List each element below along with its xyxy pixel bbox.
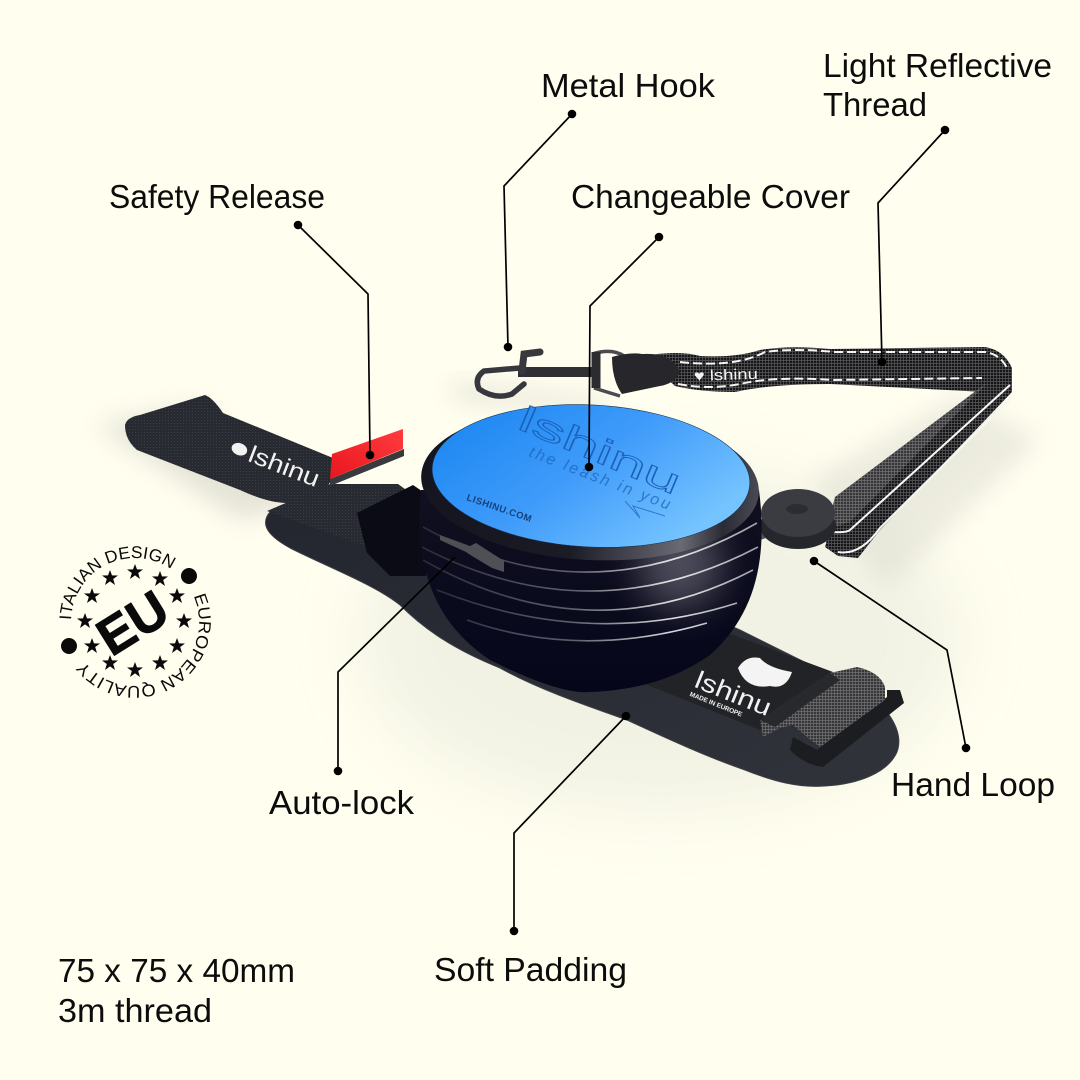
label: auto-lock: Auto-lock <box>269 784 415 821</box>
strap logo <box>227 434 323 493</box>
thread puck <box>756 489 836 549</box>
leash thread strap <box>642 347 1012 558</box>
label: changeable cover: Changeable Cover <box>571 178 850 215</box>
label: metal hook: Metal Hook <box>541 67 716 104</box>
clip block <box>357 485 432 576</box>
body ridges <box>422 523 758 641</box>
thread logo: ♥ lshinu <box>694 366 758 385</box>
badge: Italian design European quality: EU <box>87 580 179 667</box>
soft padding base <box>266 490 899 786</box>
top strap loop <box>125 395 333 503</box>
label: light reflective thread <box>823 47 1052 123</box>
cover triangle mark <box>625 501 665 518</box>
fabric loop <box>612 353 680 394</box>
rim <box>417 399 763 569</box>
badge: Italian design European quality <box>59 546 211 698</box>
dimensions text <box>58 952 295 1029</box>
badge: Italian design European quality: EUROPEAN QUALITY <box>76 594 211 698</box>
cover engraving: LISHINU.COM <box>465 492 533 525</box>
metal hook <box>477 351 624 396</box>
cover engraving: lshinu <box>513 398 687 503</box>
label: soft padding: Soft Padding <box>434 951 627 988</box>
red safety release tab <box>330 429 404 486</box>
auto-lock switch <box>440 535 504 572</box>
dimensions text: 75 x 75 x 40mm <box>58 952 295 989</box>
buckle <box>760 667 904 767</box>
device body <box>419 490 762 692</box>
product shadows <box>95 382 1040 810</box>
lower strap logo: MADE IN EUROPE <box>689 691 744 719</box>
badge: Italian design European quality: ITALIAN DESIGN <box>59 546 176 618</box>
changeable blue cover <box>429 397 753 555</box>
product: retractable leash <box>125 347 1012 786</box>
lower strap logo mark <box>738 657 792 687</box>
back strap <box>267 484 420 555</box>
lower strap logo <box>689 666 775 728</box>
lower strap with label <box>643 630 833 730</box>
strap logo: lshinu <box>245 441 323 493</box>
lower strap logo: lshinu <box>691 666 775 722</box>
label: light reflective thread: Light Reflective <box>823 47 1052 84</box>
dimensions text: 3m thread <box>58 992 212 1029</box>
label: light reflective thread: Thread <box>823 86 927 123</box>
cover engraving: the leash in you <box>527 444 673 514</box>
cover engraving <box>465 398 687 525</box>
label: hand loop: Hand Loop <box>891 766 1055 803</box>
callout lines <box>294 110 970 935</box>
label: safety release: Safety Release <box>109 178 325 215</box>
